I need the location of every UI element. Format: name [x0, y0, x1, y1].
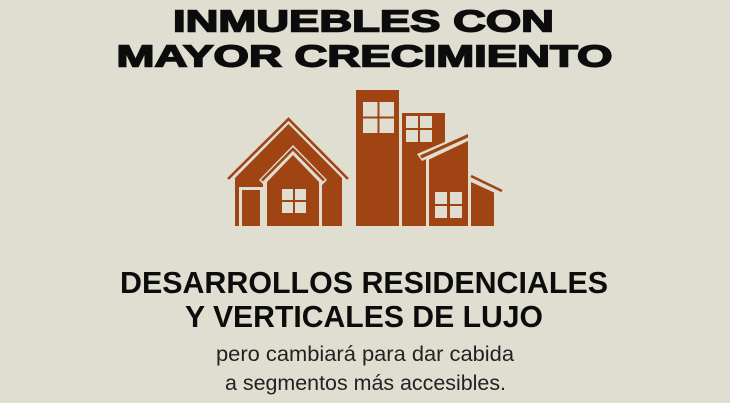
title [116, 4, 612, 74]
description text [216, 342, 514, 395]
subheading: DESARROLLOS RESIDENCIALES [120, 266, 608, 300]
subheading: Y VERTICALES DE LUJO [185, 300, 543, 334]
icon: vertical buildings [356, 90, 502, 226]
title: MAYOR CRECIMIENTO [116, 38, 612, 74]
subheading [120, 266, 608, 334]
title: INMUEBLES CON [173, 4, 554, 38]
description text: a segmentos más accesibles. [225, 371, 506, 395]
icon: house [228, 119, 348, 226]
description text: pero cambiará para dar cabida [216, 342, 514, 366]
